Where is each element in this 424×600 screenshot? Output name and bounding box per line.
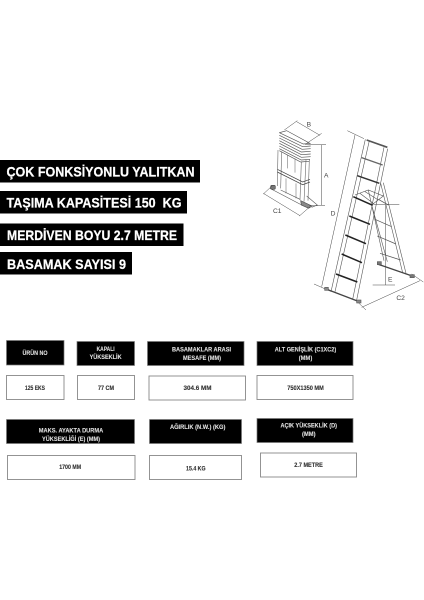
spec value: maks. ayakta durma (8, 456, 135, 480)
spec header: alt genişlik: (MM) (299, 356, 312, 362)
spec value: ürün no: 125 EKS (25, 386, 45, 392)
diagram: dimension lines and labels (263, 121, 423, 310)
banner: feature 1: ÇOK FONKSİYONLU YALITKAN (6, 163, 194, 179)
banner: feature 4: BASAMAK SAYISI 9 (7, 256, 126, 272)
spec header: basamak arası mesafe: BASAMAKLAR ARASI (172, 348, 231, 354)
diagram: dimension lines and labels: A (324, 173, 329, 180)
diagram: dimension lines and labels: E (388, 276, 393, 283)
spec header: basamak arası mesafe: MESAFE (MM) (183, 356, 221, 362)
spec header: açık yükseklik (257, 418, 353, 442)
spec header: ürün no: ÜRÜN NO (22, 350, 48, 357)
spec header: ağırlık (150, 420, 242, 444)
diagram: rear ladder section (355, 183, 414, 278)
banner: feature 1 (0, 160, 200, 182)
spec value: ürün no (6, 376, 64, 400)
spec header: açık yükseklik: AÇIK YÜKSEKLİK (D) (280, 422, 337, 429)
banner: feature 3: MERDİVEN BOYU 2.7 METRE (7, 227, 177, 243)
spec value: kapalı yükseklik: 77 CM (98, 386, 114, 392)
spec header: alt genişlik: ALT GENİŞLİK (C1XC2) (275, 347, 336, 354)
diagram: dimension lines and labels: D (331, 210, 336, 217)
spec header: alt genişlik (257, 342, 353, 366)
banner: feature 2: TAŞIMA KAPASİTESİ 150 KG (6, 194, 182, 210)
spec value: basamak arası (149, 376, 246, 400)
diagram: folded ladder (270, 131, 317, 208)
diagram: dimension lines and labels: B (307, 122, 312, 129)
diagram: dimension lines and labels: C2 (396, 295, 405, 302)
diagram: front ladder section (325, 139, 388, 303)
spec header: kapalı yükseklik: YÜKSEKLİK (90, 354, 122, 361)
spec header: ağırlık: AĞIRLIK (N.W.) (KG) (170, 423, 225, 431)
spec value: açık yükseklik: 2.7 METRE (294, 463, 323, 469)
spec header: kapalı yükseklik (77, 342, 134, 366)
spec value: ağırlık (150, 456, 242, 480)
diagram: dimension lines and labels: C1 (273, 208, 282, 215)
banner: feature 2 (0, 191, 187, 214)
spec header: maks. ayakta durma: MAKS. AYAKTA DURMA (39, 428, 104, 434)
spec header: açık yükseklik: (MM) (302, 432, 316, 438)
spec header: basamak arası mesafe (148, 342, 244, 366)
spec value: kapalı yükseklik (78, 376, 134, 400)
spec value: basamak arası: 304.6 MM (184, 386, 212, 392)
spec header: maks. ayakta durma: YÜKSEKLİĞİ (E) (MM) (42, 435, 100, 443)
spec value: maks. ayakta durma: 1700 MM (59, 465, 81, 471)
banner: feature 3 (0, 224, 184, 246)
ladder technical diagram (263, 121, 423, 310)
banner: feature 4 (0, 252, 132, 274)
spec value: açık yükseklik (260, 453, 356, 477)
spec header: kapalı yükseklik: KAPALI (97, 347, 115, 353)
spec value: ağırlık: 15.4 KG (186, 466, 206, 472)
spec header: ürün no (6, 340, 64, 365)
spec header: maks. ayakta durma (6, 420, 134, 444)
spec value: alt genişlik (257, 376, 353, 400)
spec value: alt genişlik: 750X1350 MM (287, 386, 324, 392)
